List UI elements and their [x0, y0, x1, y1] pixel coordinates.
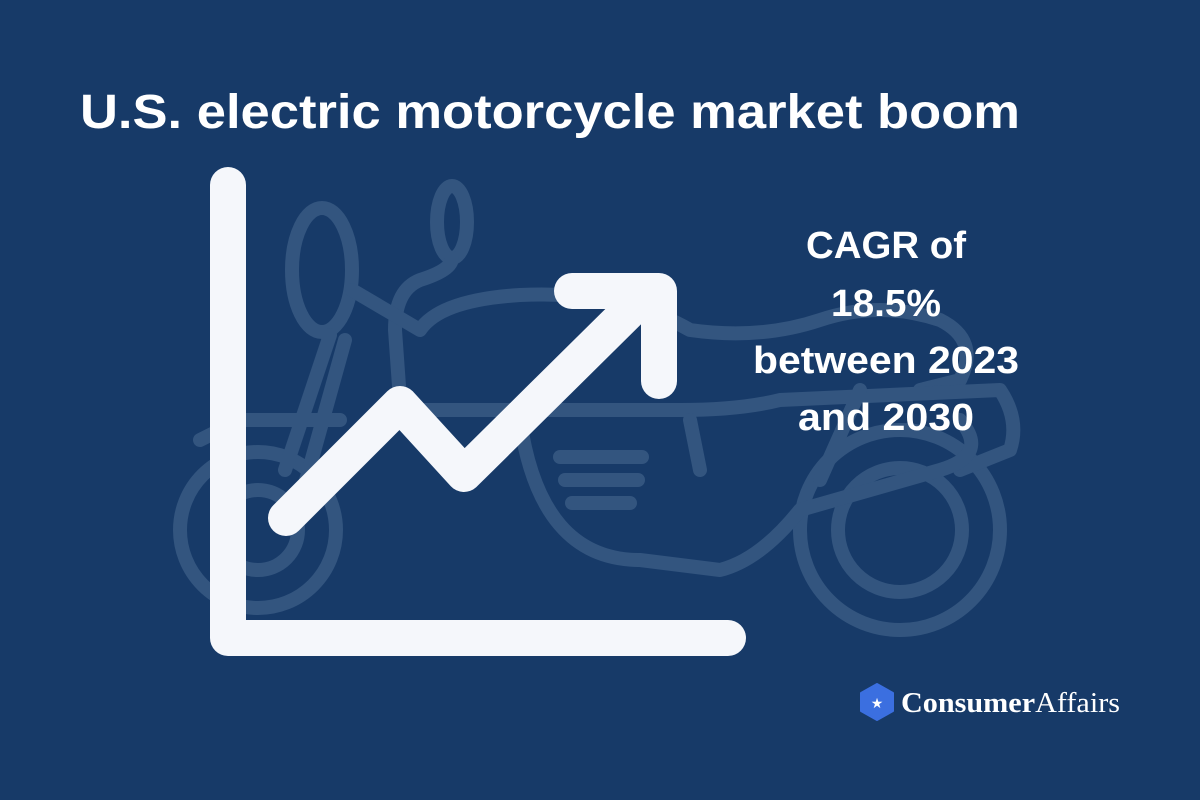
chart: axes — [228, 185, 728, 638]
text block: CAGR stat: CAGR of — [806, 225, 966, 267]
logo: ConsumerAffairs: ConsumerAffairs — [901, 687, 1120, 719]
logo: ConsumerAffairs: ★ — [871, 696, 883, 712]
text block: CAGR stat — [753, 225, 1019, 439]
text block: CAGR stat: and 2030 — [798, 397, 974, 439]
arrow: growth trend — [286, 291, 659, 518]
title: U.S. electric motorcycle market boom — [80, 86, 1020, 139]
text block: CAGR stat: 18.5% — [831, 283, 941, 325]
text block: CAGR stat: between 2023 — [753, 340, 1019, 382]
icon: motorcycle background — [180, 186, 1013, 630]
